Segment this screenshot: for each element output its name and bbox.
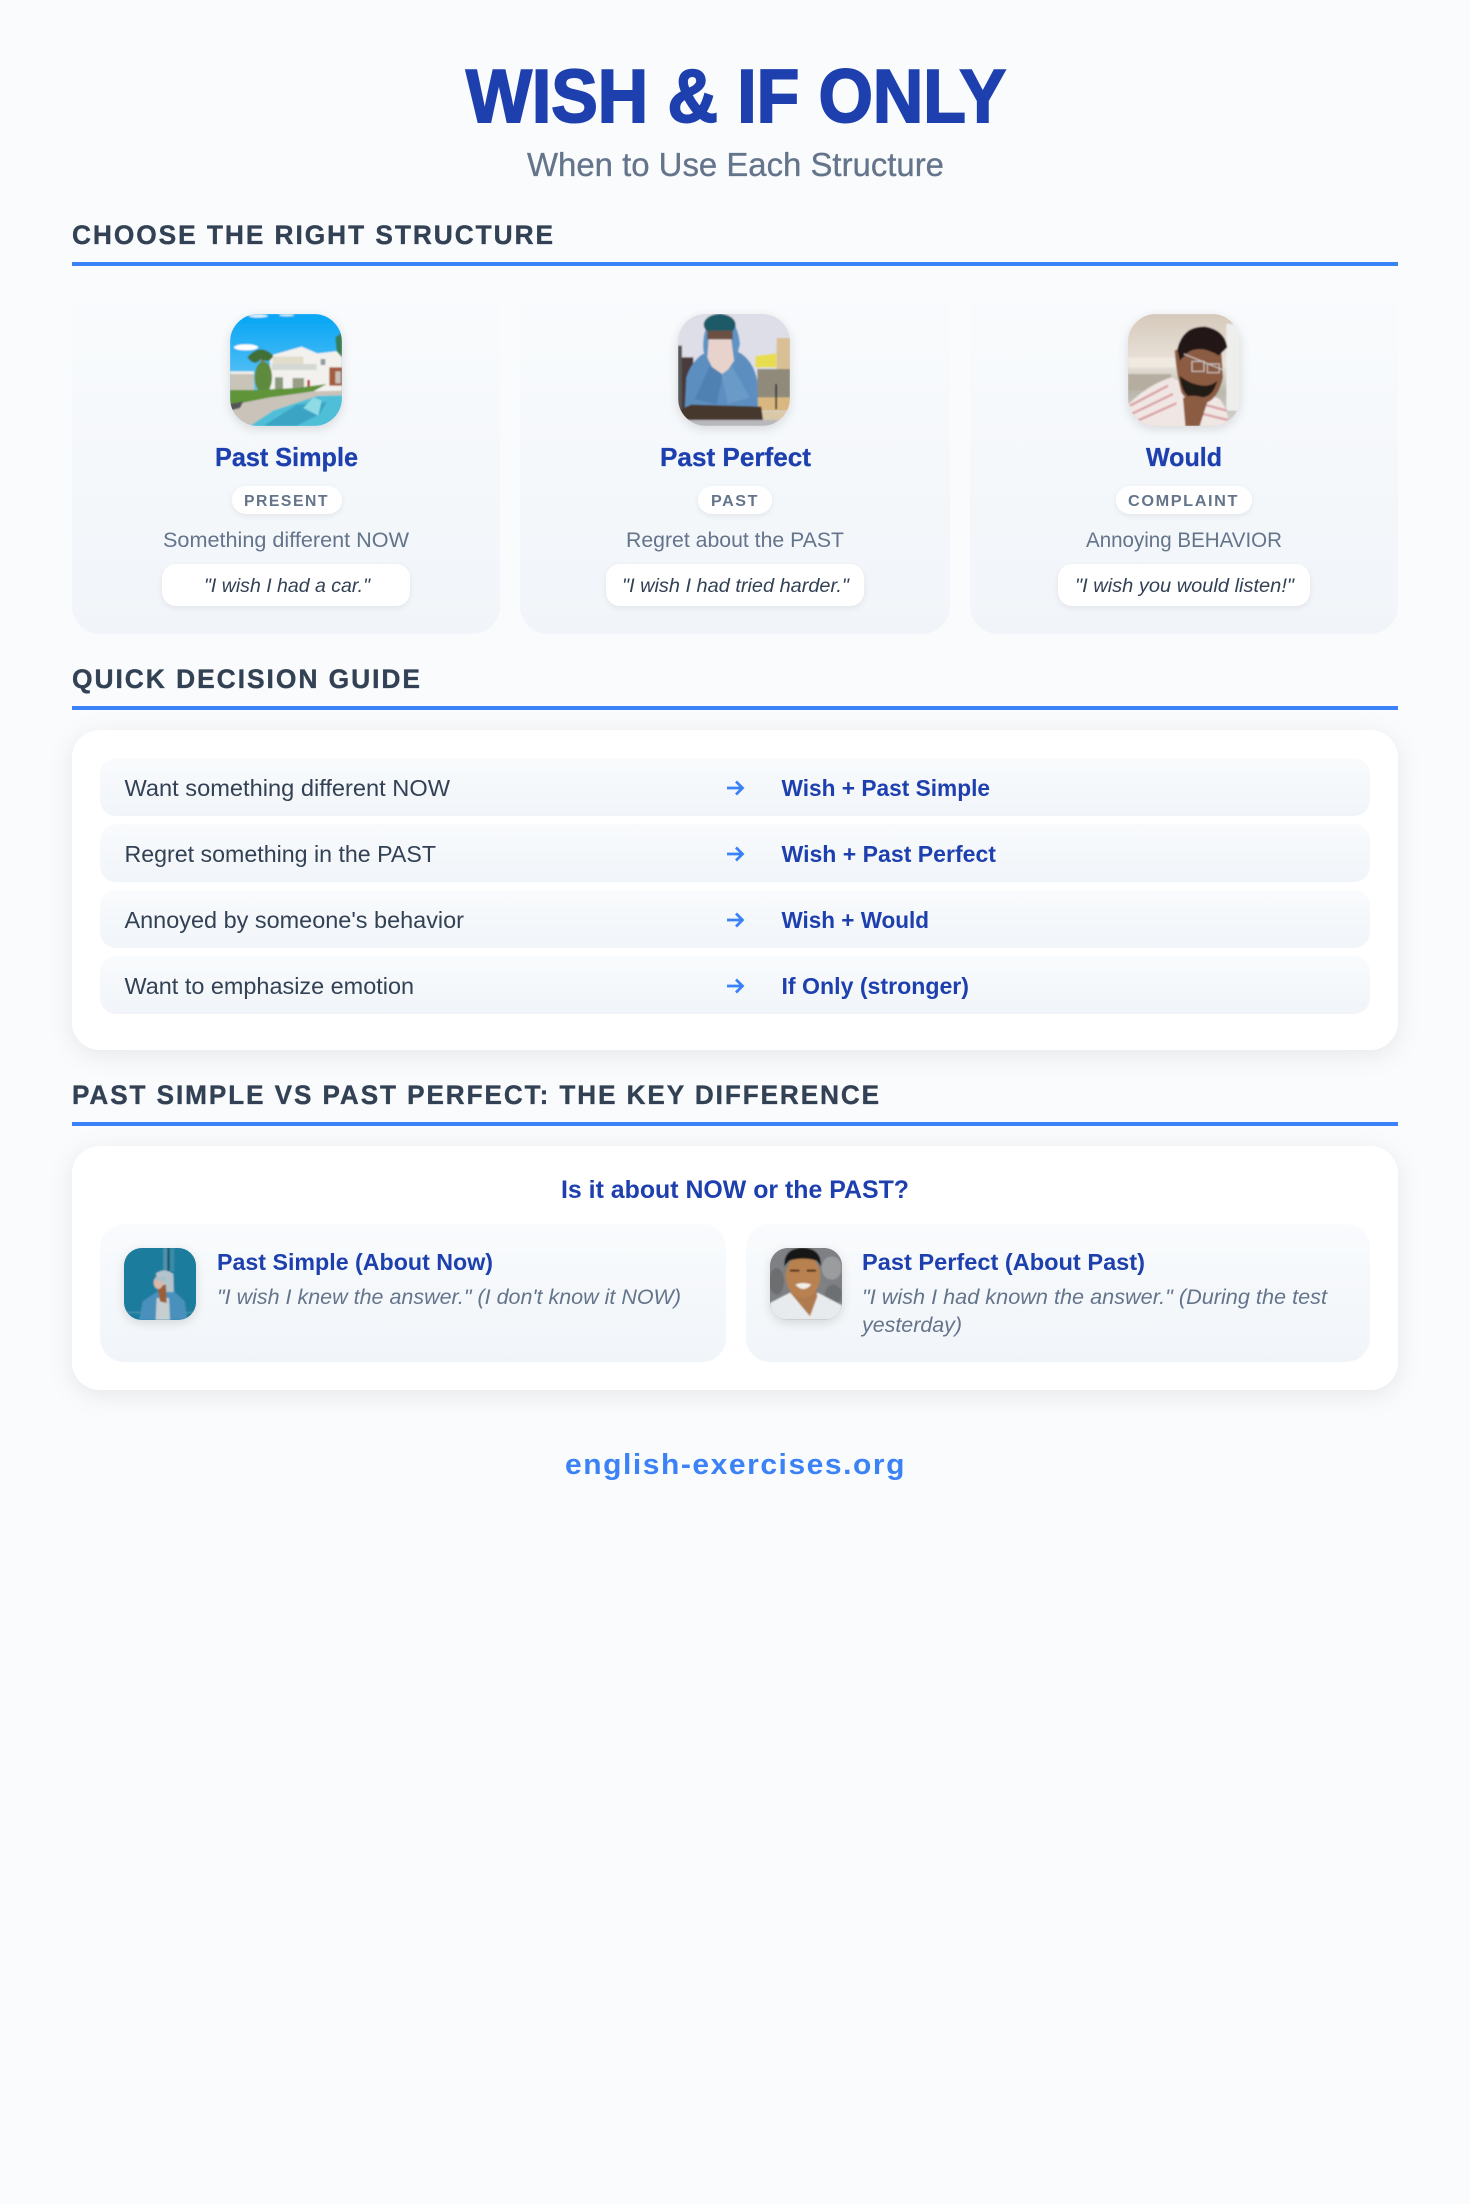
- comparison: past perfect: [746, 1243, 1370, 1362]
- guide row 1: [100, 758, 1370, 816]
- arrow: [727, 848, 742, 860]
- guide row 4: If Only (stronger): [782, 973, 969, 999]
- section heading: quick decision guide: QUICK DECISION GUIDE: [72, 664, 422, 694]
- arrow: [727, 980, 742, 992]
- footer website: english-exercises.org: [565, 1449, 906, 1481]
- panel: past simple card: [157, 314, 414, 613]
- panel: decision guide: [72, 730, 1398, 1050]
- description: Annoying BEHAVIOR: [1086, 529, 1282, 552]
- card title: Would: [1146, 442, 1222, 472]
- panel: key difference: [72, 1146, 1398, 1390]
- icon: man in hoodie covering face: [678, 314, 790, 426]
- example quote: [606, 564, 864, 606]
- section heading: key difference: [72, 1080, 1398, 1126]
- icon: thoughtful man with glasses: [1128, 314, 1240, 426]
- panel question: Is it about NOW or the PAST?: [561, 1176, 909, 1204]
- example quote: "I wish I had a car.": [204, 576, 371, 597]
- badge: complaint: COMPLAINT: [1128, 493, 1239, 510]
- header: [466, 54, 1006, 183]
- panel: would card: [1053, 314, 1314, 613]
- badge: past: PAST: [711, 493, 759, 510]
- section heading: choose the right structure: CHOOSE THE RIGHT STRUCTURE: [72, 220, 555, 250]
- panel: past perfect card: [601, 314, 868, 613]
- guide row 1: Want something different NOW: [124, 775, 450, 801]
- guide row 2: [100, 824, 1370, 882]
- badge: past: [698, 486, 772, 514]
- description: Something different NOW: [163, 529, 409, 552]
- guide row 2: Regret something in the PAST: [124, 841, 436, 867]
- comparison text: [860, 1249, 1328, 1337]
- section heading: choose the right structure: [72, 220, 1398, 266]
- example quote: [162, 564, 410, 606]
- comparison text: Past Perfect (About Past): [862, 1249, 1145, 1275]
- subtitle: When to Use Each Structure: [527, 146, 944, 183]
- icon: smiling man: [769, 1248, 842, 1320]
- guide row 3: Wish + Would: [782, 907, 929, 933]
- comparison: past simple: [100, 1243, 726, 1362]
- comparison text: "I wish I knew the answer." (I don't know it NOW): [217, 1286, 681, 1309]
- example quote: "I wish I had tried harder.": [622, 576, 850, 597]
- badge: present: [232, 486, 342, 514]
- icon: house with pool: [230, 314, 342, 426]
- guide row 3: Annoyed by someone's behavior: [124, 907, 464, 933]
- comparison text: "I wish I had known the answer." (During the test: [862, 1286, 1328, 1309]
- guide row 4: Want to emphasize emotion: [124, 973, 414, 999]
- card title: Past Perfect: [660, 442, 811, 472]
- guide row 4: [100, 956, 1370, 1014]
- arrow: [727, 914, 742, 926]
- section heading: key difference: PAST SIMPLE VS PAST PERFECT: THE KEY DIFFERENCE: [72, 1080, 881, 1110]
- comparison text: [217, 1249, 681, 1309]
- example quote: [1058, 564, 1310, 606]
- arrow: [727, 782, 742, 794]
- comparison text: Past Simple (About Now): [217, 1249, 493, 1275]
- badge: present: PRESENT: [244, 493, 329, 510]
- description: Regret about the PAST: [626, 529, 844, 552]
- title: WISH & IF ONLY: [466, 54, 1006, 138]
- guide row 1: Wish + Past Simple: [782, 775, 990, 801]
- guide row 2: Wish + Past Perfect: [782, 841, 996, 867]
- comparison text: yesterday): [860, 1314, 962, 1337]
- example quote: "I wish you would listen!": [1075, 576, 1295, 597]
- guide row 3: [100, 890, 1370, 948]
- card title: Past Simple: [215, 442, 358, 472]
- badge: complaint: [1116, 486, 1252, 514]
- section heading: quick decision guide: [72, 664, 1398, 710]
- icon: woman in denim jacket: [124, 1248, 196, 1320]
